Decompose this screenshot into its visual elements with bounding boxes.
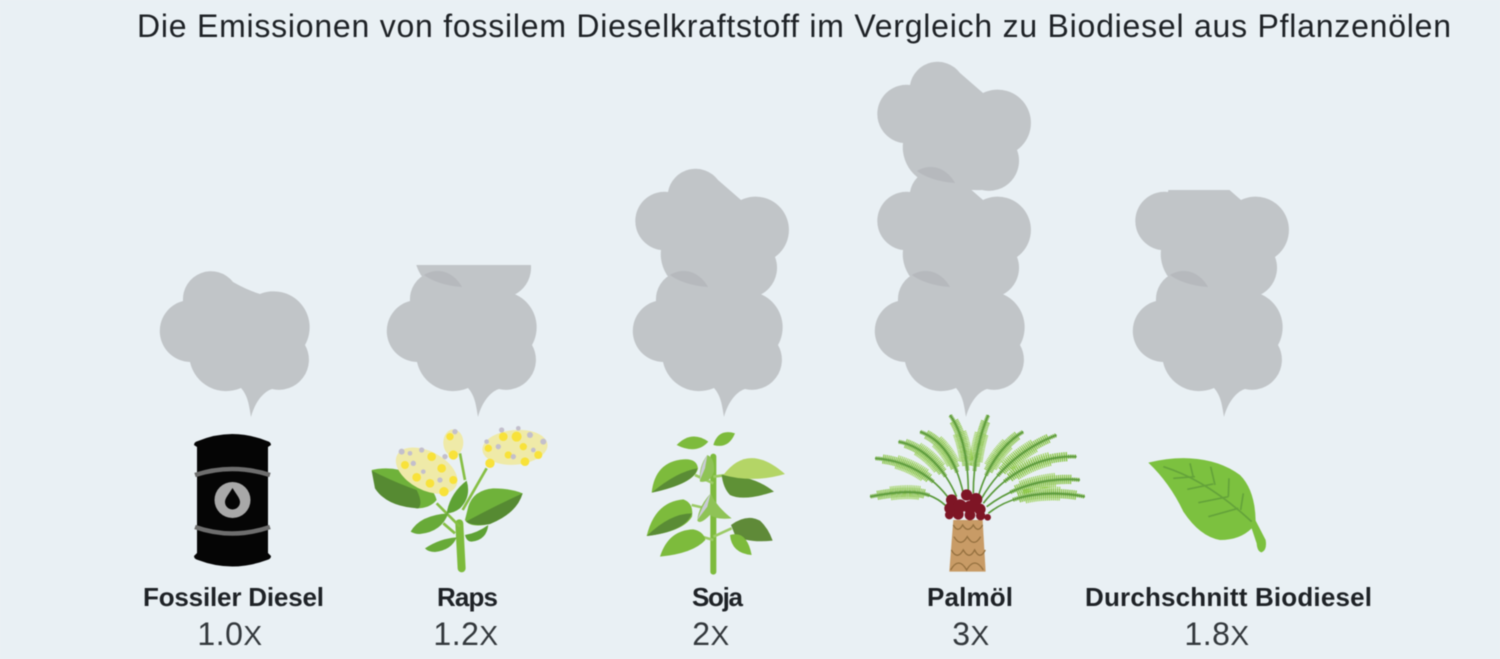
flowers xyxy=(388,426,549,503)
emission clouds: rapeseed xyxy=(386,264,537,416)
label: palm oil: Palmöl xyxy=(927,582,1013,612)
icon: leaf xyxy=(1148,458,1266,552)
emission cloud: fossil diesel xyxy=(160,271,310,417)
label: rapeseed: Raps xyxy=(437,582,498,612)
icon: soy plant xyxy=(647,432,785,572)
label: soy xyxy=(692,582,744,652)
icon: oil barrel xyxy=(194,434,271,566)
label: palm oil: 3X xyxy=(952,616,990,652)
emission clouds: soy xyxy=(633,169,789,417)
label: soy: Soja xyxy=(692,582,744,612)
label: rapeseed xyxy=(433,582,499,652)
emission clouds: average biodiesel xyxy=(1133,169,1289,417)
label: palm oil xyxy=(927,582,1013,652)
label: fossil diesel: 1.0X xyxy=(197,616,263,652)
label: fossil diesel xyxy=(143,582,324,652)
title: Die Emissionen von fossilem Dieselkraftstoff im Vergleich zu Biodiesel aus Pflanzenölen xyxy=(137,8,1451,44)
icon: rapeseed plant xyxy=(372,426,549,568)
label: average biodiesel: Durchschnitt Biodiesel xyxy=(1085,582,1372,612)
label: soy: 2X xyxy=(692,616,730,652)
label: rapeseed: 1.2X xyxy=(433,616,499,652)
label: average biodiesel xyxy=(1085,582,1372,652)
label: fossil diesel: Fossiler Diesel xyxy=(143,582,324,612)
icon: oil palm xyxy=(870,415,1085,572)
emission clouds: palm oil xyxy=(875,62,1031,417)
label: average biodiesel: 1.8X xyxy=(1184,616,1250,652)
